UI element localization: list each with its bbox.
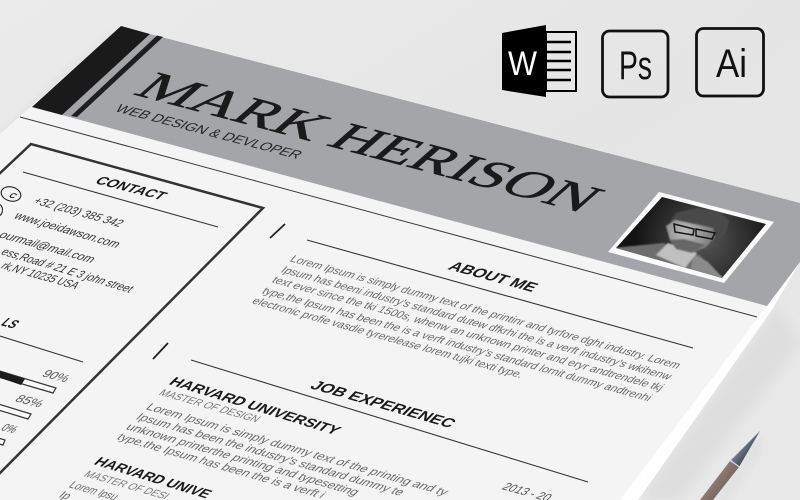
contact details — [0, 195, 138, 295]
second job entry: HARVARD UNIVE — [91, 454, 216, 500]
black sidebar stripe — [32, 26, 150, 115]
first job entry: HARVARD UNIVERSITY — [166, 374, 346, 437]
icon: phone: C — [7, 191, 20, 200]
header rule — [20, 117, 757, 317]
first job entry: Ipsum has been the industry's standard dummy te — [133, 411, 409, 498]
job heading: JOB EXPERIENEC — [306, 379, 459, 431]
skill bar third — [0, 424, 18, 446]
first job entry — [114, 374, 452, 500]
tick mark — [153, 343, 168, 359]
pen body — [700, 461, 739, 500]
icon: Illustrator: Ai — [716, 42, 747, 86]
neck — [656, 243, 697, 268]
first job entry: MASTER OF DESIGN — [156, 388, 263, 425]
about paragraph: text ever since the tki 1500s, whenw an unknown printer and eryr andtrendele tkj — [269, 275, 666, 393]
job subtitle: WEB DESIGN & DEVLOPER — [112, 102, 306, 161]
skill bar 85%: 85% — [12, 393, 47, 410]
face — [666, 220, 715, 253]
icon: Word: W — [508, 45, 537, 83]
skill bar 90%: 90% — [39, 368, 73, 385]
about paragraph: type,the Ipsum has been the is a verft industry's standard lornit dummy andtrenhi — [259, 286, 654, 404]
tick mark — [270, 224, 285, 238]
name heading: MARK HERISON — [124, 64, 616, 220]
icon: phone — [0, 186, 22, 202]
pen tip — [731, 431, 760, 467]
contact details: www.joeidawson.com — [10, 210, 124, 250]
about paragraph: electronic profie vasdie tyrerelease lorem tujki texti type. — [249, 296, 526, 380]
file format icons — [502, 25, 764, 97]
portrait photo — [608, 192, 774, 285]
contact heading: CONTACT — [92, 174, 172, 202]
skill bar 85% — [0, 395, 43, 420]
thin black stripe — [71, 36, 163, 117]
panel: job experience — [56, 343, 588, 500]
about heading: ABOUT ME — [444, 260, 541, 295]
shirt — [616, 242, 722, 278]
beard — [670, 239, 706, 253]
contact details: rk,NY 10235 USA — [0, 260, 84, 291]
about paragraph — [249, 254, 683, 404]
contact details: ess,Road # 21 E 3 john street — [0, 246, 138, 295]
icon: Photoshop: Ps — [619, 44, 652, 88]
about paragraph: Ipsum has beeni industry's standard dutew dfkrhi the is a verft industry's wkihenw — [278, 265, 675, 382]
about paragraph: Lorem Ipsum is simply dummy text of the printinr and tyrfore dght industry. Lorem — [287, 254, 683, 371]
first job entry: type.the Ipsum has been the is a verft i — [114, 431, 329, 500]
job rule — [191, 360, 588, 482]
second job entry — [59, 457, 212, 500]
panel: contact sidebar — [0, 144, 263, 477]
icon: Illustrator — [696, 28, 764, 96]
glasses — [674, 224, 715, 239]
panel: about me — [249, 224, 693, 404]
pen — [700, 431, 760, 500]
icon: web — [0, 204, 2, 216]
hair — [670, 208, 729, 232]
hood — [690, 255, 722, 278]
header band — [32, 26, 800, 306]
skill bar 90% — [0, 370, 70, 394]
first job entry: Lorem Ipsum is simply dummy text of the printing and ty — [143, 401, 452, 498]
about rule — [307, 240, 693, 348]
icon: Word — [502, 25, 576, 97]
icon: Photoshop — [602, 31, 668, 97]
contact details: +32 (203) 385 342 — [30, 195, 127, 229]
first job entry: unknown printerthe printing and typesetting — [123, 421, 363, 498]
